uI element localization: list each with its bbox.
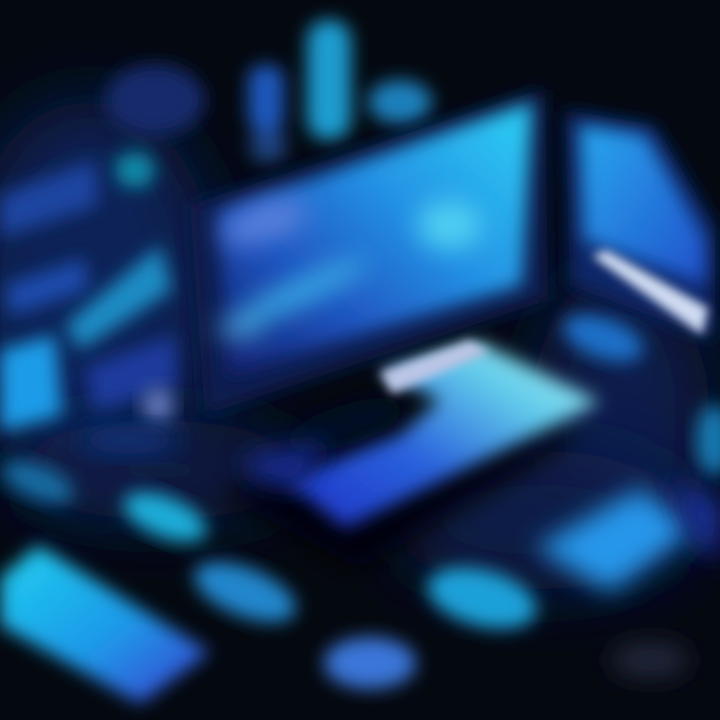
white bar — [592, 250, 708, 335]
laptop dark hinge — [282, 387, 408, 463]
card: teal right — [421, 556, 543, 640]
card: bottom centre — [324, 637, 416, 689]
card: teal — [117, 482, 213, 552]
panel: left floating cards and line chart — [0, 160, 180, 454]
screen highlights — [217, 191, 482, 338]
bar chart: top floating bars — [105, 20, 432, 188]
card: large cyan — [0, 545, 210, 704]
panel: right device — [557, 110, 720, 476]
white bar — [380, 340, 490, 394]
monitor frame — [190, 88, 548, 415]
monitor — [190, 88, 548, 415]
laptop base shadow — [225, 430, 580, 570]
card: dark lower right — [610, 642, 690, 678]
laptop — [225, 340, 600, 570]
card: small left — [0, 452, 80, 512]
monitor screen — [218, 102, 532, 375]
card: large right — [535, 488, 695, 592]
laptop deck — [285, 342, 600, 528]
bottom cards — [0, 452, 720, 704]
card: blue — [186, 550, 304, 634]
